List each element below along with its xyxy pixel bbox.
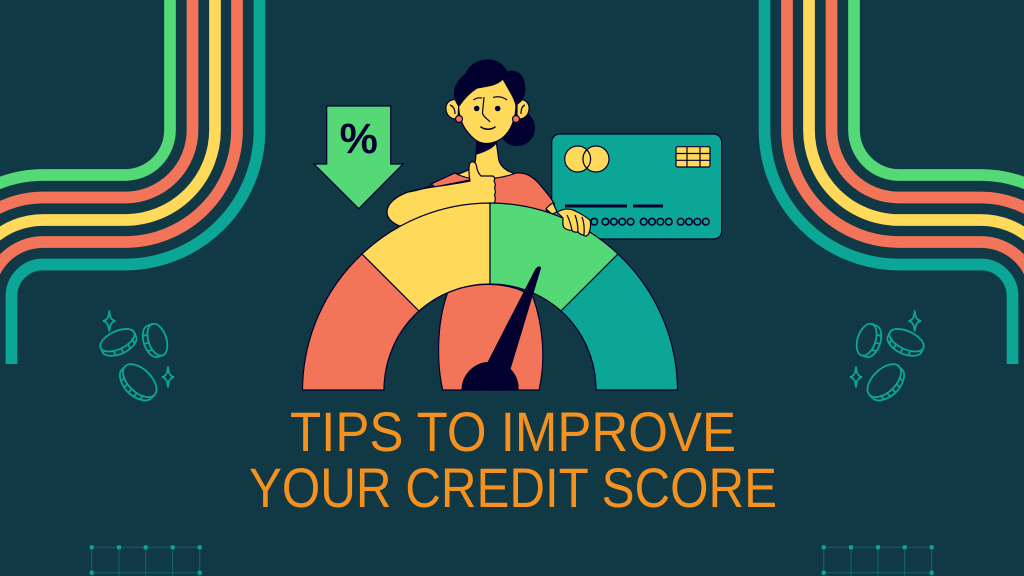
hand gripping gauge <box>557 209 591 236</box>
card number rings <box>566 218 709 225</box>
credit score gauge <box>302 203 678 390</box>
card logo circles <box>565 146 609 172</box>
neck shadow <box>476 141 497 154</box>
icon: right coins and sparkles <box>850 311 927 407</box>
upper arm <box>546 203 557 214</box>
right bottom grid <box>822 545 934 576</box>
left rainbow stripes <box>0 0 260 364</box>
icon: percent down arrow: % <box>340 115 378 163</box>
card chip <box>676 147 710 167</box>
gauge segment: green <box>490 203 618 311</box>
icon: percent down arrow <box>314 106 403 209</box>
hair bun <box>500 110 534 146</box>
left bottom grid <box>90 545 202 576</box>
title line 1: TIPS TO IMPROVE <box>290 400 736 463</box>
mouth <box>481 127 495 129</box>
hair <box>455 60 525 106</box>
earrings <box>456 116 462 122</box>
sleeve fold <box>408 186 431 192</box>
card name lines <box>565 204 663 208</box>
neck <box>458 140 516 185</box>
gauge segment: coral <box>302 254 419 390</box>
gauge segment: yellow <box>362 203 490 311</box>
ears <box>446 100 459 119</box>
shirt <box>431 173 554 212</box>
face <box>458 76 516 144</box>
nose and brows <box>474 97 507 122</box>
gauge segment: teal <box>561 254 678 390</box>
right rainbow stripes <box>764 0 1024 364</box>
title line 2: YOUR CREDIT SCORE <box>249 456 777 519</box>
arm with thumbs up <box>387 162 495 226</box>
credit card <box>552 134 722 239</box>
icon: left coins and sparkles <box>97 311 174 407</box>
eyes <box>474 106 480 111</box>
gauge center coral <box>439 284 543 390</box>
title <box>249 400 777 519</box>
woman figure <box>387 60 557 226</box>
needle <box>462 267 540 390</box>
